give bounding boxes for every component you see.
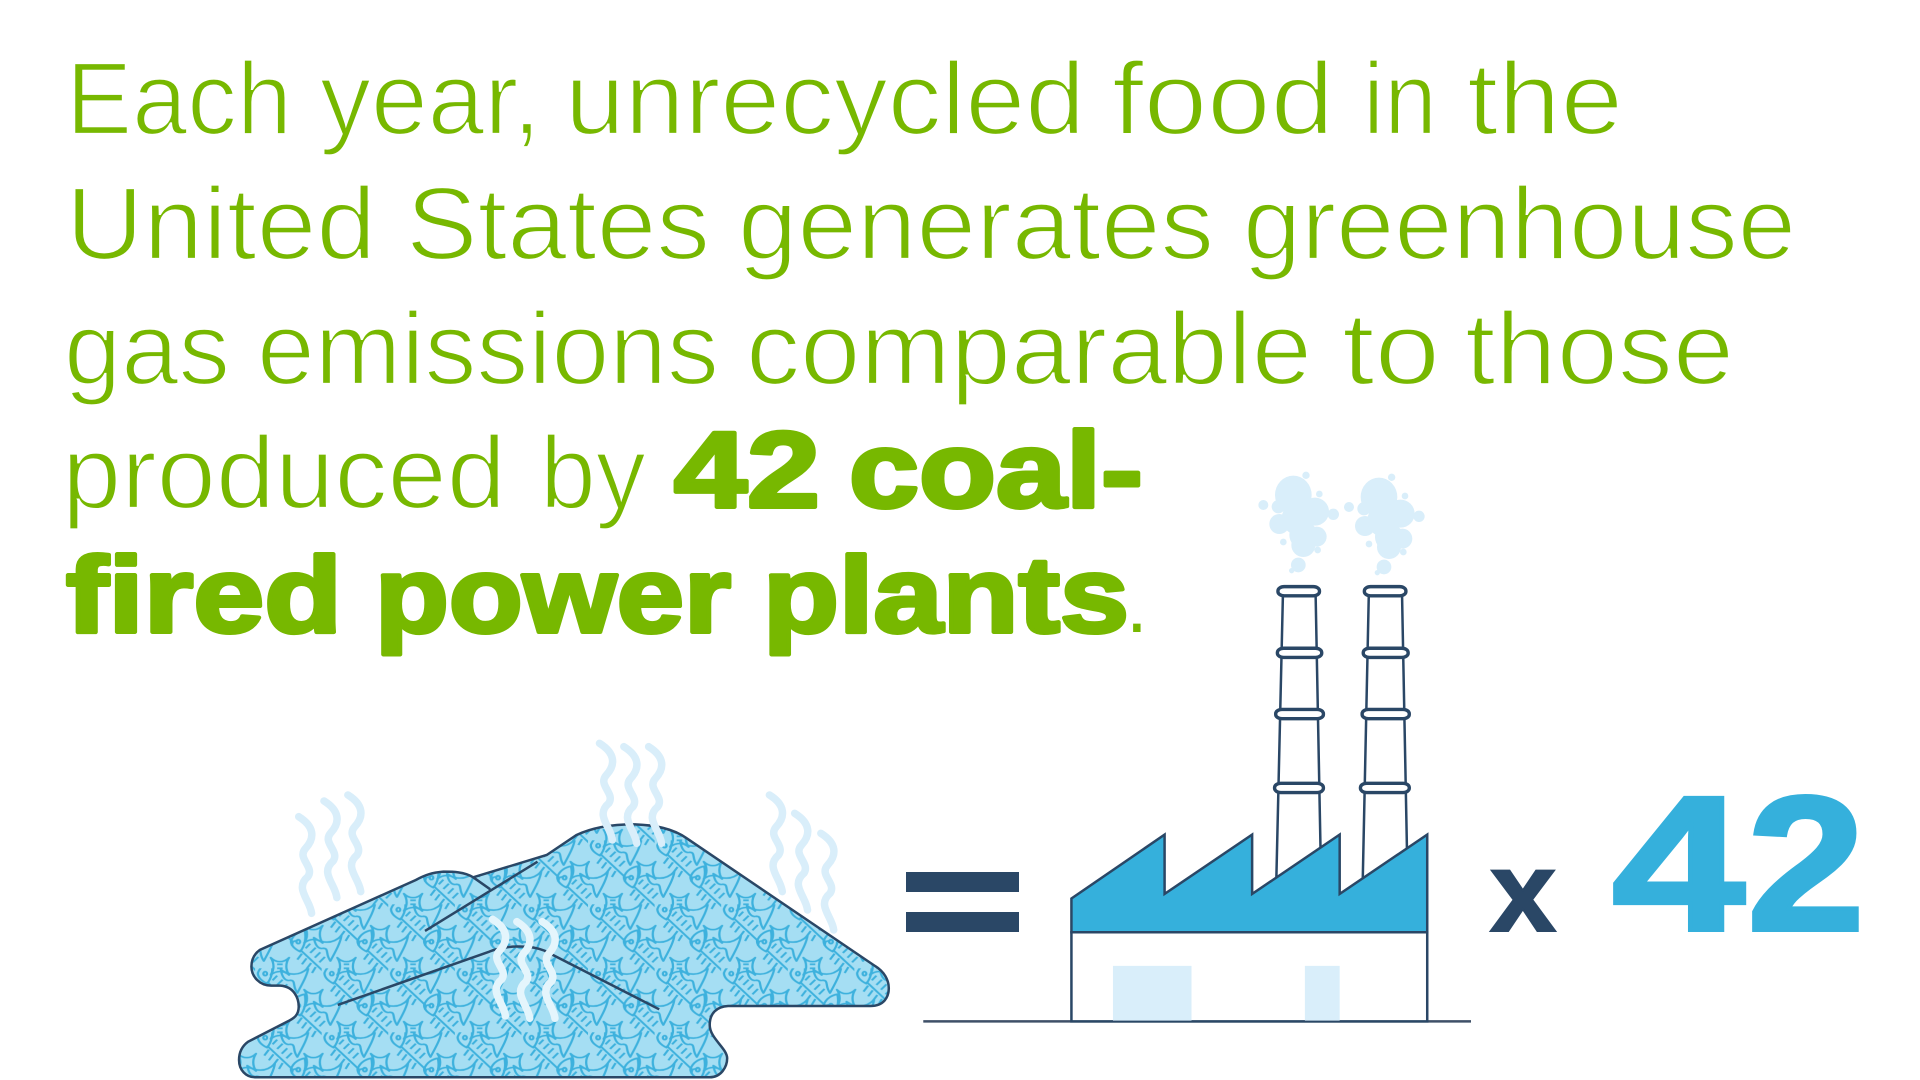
- number 42: 4: [1612, 756, 1745, 971]
- bold figure: 42 coal-: coal-: [849, 409, 1143, 530]
- headline line 1: unrecycled: [565, 41, 1085, 156]
- bold figure: fired power plants: fired: [66, 534, 342, 655]
- ground line: [923, 1020, 1471, 1023]
- chimney right: [1360, 587, 1409, 882]
- factory door: [1305, 966, 1340, 1021]
- headline line 2: States: [406, 166, 710, 281]
- steam: centre group: [493, 919, 555, 1018]
- illustration: rotting food pile with steam: [239, 743, 889, 1077]
- number 42: [1612, 756, 1865, 971]
- headline line 3: comparable: [746, 291, 1312, 406]
- factory body: [1071, 932, 1427, 1021]
- steam: left group: [299, 795, 361, 913]
- headline line 4: produced: [62, 415, 506, 530]
- number 42: 2: [1747, 756, 1865, 971]
- steam: top group: [600, 743, 662, 843]
- headline line 1: food: [1112, 41, 1334, 156]
- bold figure: fired power plants: plants: [763, 534, 1129, 655]
- headline line 1: Each: [66, 41, 292, 156]
- headline line 3: emissions: [257, 291, 719, 406]
- headline line 2: greenhouse: [1243, 166, 1796, 281]
- headline line 3: those: [1465, 291, 1734, 406]
- smoke cloud right: [1344, 474, 1425, 575]
- factory roof: [1071, 835, 1427, 932]
- headline line 2: [66, 166, 1796, 281]
- headline line 4: by: [540, 415, 646, 530]
- headline: [62, 41, 1796, 655]
- food pile shape: [239, 824, 889, 1077]
- bold figure: fired power plants: power: [375, 534, 731, 655]
- bold figure: 42 coal-: 42: [674, 409, 820, 530]
- headline line 1: the: [1467, 41, 1623, 156]
- bold figure: 42 coal-: [674, 409, 1143, 530]
- headline line 3: gas: [64, 291, 230, 406]
- factory window: [1113, 966, 1192, 1021]
- bold figure: fired power plants: [66, 534, 1129, 655]
- headline line 1: [66, 41, 1623, 156]
- equals sign: [906, 872, 1019, 932]
- closing period: .: [1126, 561, 1148, 649]
- headline line 1: in: [1363, 41, 1437, 156]
- pile ridge lines: [338, 862, 659, 1009]
- icon: smoke clouds: [1258, 472, 1425, 575]
- headline line 3: [64, 291, 1734, 406]
- steam: right group: [769, 795, 834, 930]
- headline line 3: to: [1342, 291, 1440, 406]
- multiplier x: x: [1490, 829, 1556, 956]
- headline line 2: United: [66, 166, 376, 281]
- headline line 2: generates: [738, 166, 1214, 281]
- chimney left: [1275, 587, 1323, 882]
- icon: factory: [923, 587, 1471, 1021]
- smoke cloud left: [1258, 472, 1339, 573]
- headline line 1: year,: [320, 41, 541, 156]
